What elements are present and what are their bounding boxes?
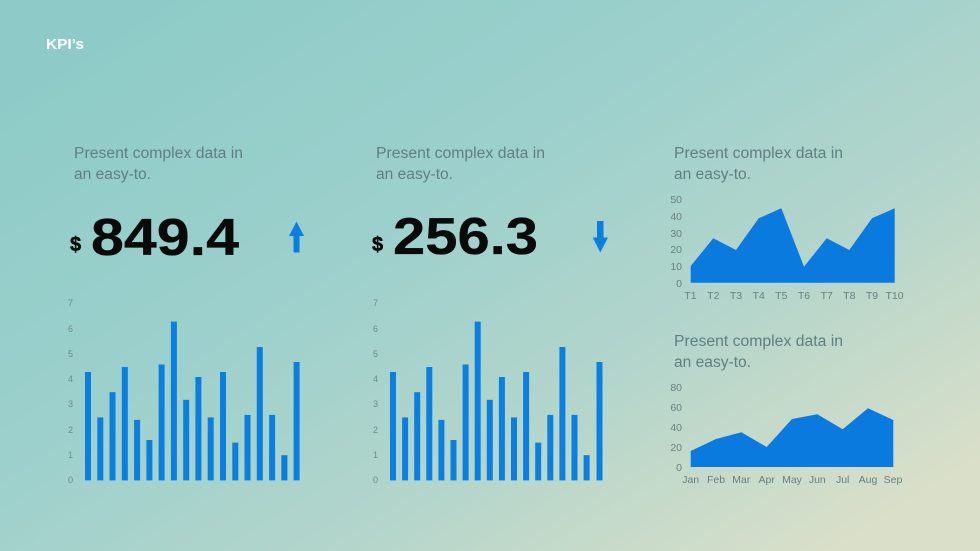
description text [674,333,843,371]
area chart: T3 [730,290,742,302]
bar chart: 5 [373,349,378,359]
panel: KPI 849.4 [68,145,304,485]
area chart: Jan [682,474,699,486]
area chart: May [782,474,803,486]
description text: an easy-to. [74,166,151,183]
area chart: Mar [732,474,751,486]
area chart: 0 [676,462,682,474]
bar chart: 1 [68,450,73,460]
area chart: T4 [753,290,765,302]
area chart: Sep [884,474,902,486]
value 256.3: $ [372,234,383,256]
bar chart [68,298,300,485]
area chart: Apr [759,474,775,486]
bar chart [373,298,602,485]
bar chart: 7 [373,298,378,308]
description text: Present complex data in [74,145,243,162]
area chart: 30 [670,228,682,240]
bar chart: 3 [373,399,378,409]
area chart: T1 [684,290,697,302]
bar chart: 6 [68,324,73,334]
area chart: T9 [866,290,878,302]
bar chart: 3 [68,399,73,409]
area chart: T6 [798,290,810,302]
description text: an easy-to. [376,166,453,183]
area chart: 20 [670,244,682,256]
area chart: T10 [885,290,904,302]
area chart: Aug [859,474,877,486]
area chart: Jun [809,474,826,486]
area chart [670,382,902,486]
area chart: T7 [821,290,833,302]
bar chart: 4 [68,374,73,384]
bar chart: 0 [373,475,378,485]
description text [376,145,545,183]
bar chart: 2 [68,425,73,435]
description text: Present complex data in [674,145,843,162]
area chart: 80 [670,382,682,394]
area chart: T5 [775,290,788,302]
description text: an easy-to. [674,166,751,183]
bar chart: 4 [373,374,378,384]
bar chart: 5 [68,349,73,359]
bar chart: 2 [373,425,378,435]
area chart [670,194,904,302]
bar chart: 6 [373,324,378,334]
value 256.3: 256.3 [393,208,538,266]
area chart: 0 [676,278,682,290]
area chart: 40 [670,422,682,434]
icon: up arrow [289,222,304,252]
description text: an easy-to. [674,354,751,371]
description text [74,145,243,183]
area chart: 40 [670,211,682,223]
panel: area chart Jan-Sep [670,333,902,486]
area chart: Feb [707,474,725,486]
value 849.4: $ [70,234,81,256]
description text: Present complex data in [376,145,545,162]
panel: area chart T1-T10 [670,145,904,302]
value 849.4: 849.4 [91,209,239,267]
description text: Present complex data in [674,333,843,350]
area chart: Jul [836,474,849,486]
icon: down arrow [593,221,608,252]
area chart: T2 [707,290,720,302]
area chart: 10 [670,261,682,273]
area chart: 20 [670,442,682,454]
area chart: 50 [670,194,682,206]
bar chart: 7 [68,298,73,308]
panel: KPI 256.3 [372,145,608,485]
description text [674,145,843,183]
area chart: 60 [670,402,682,414]
bar chart: 1 [373,450,378,460]
bar chart: 0 [68,475,73,485]
title: KPI’s [46,37,84,53]
area chart: T8 [843,290,856,302]
